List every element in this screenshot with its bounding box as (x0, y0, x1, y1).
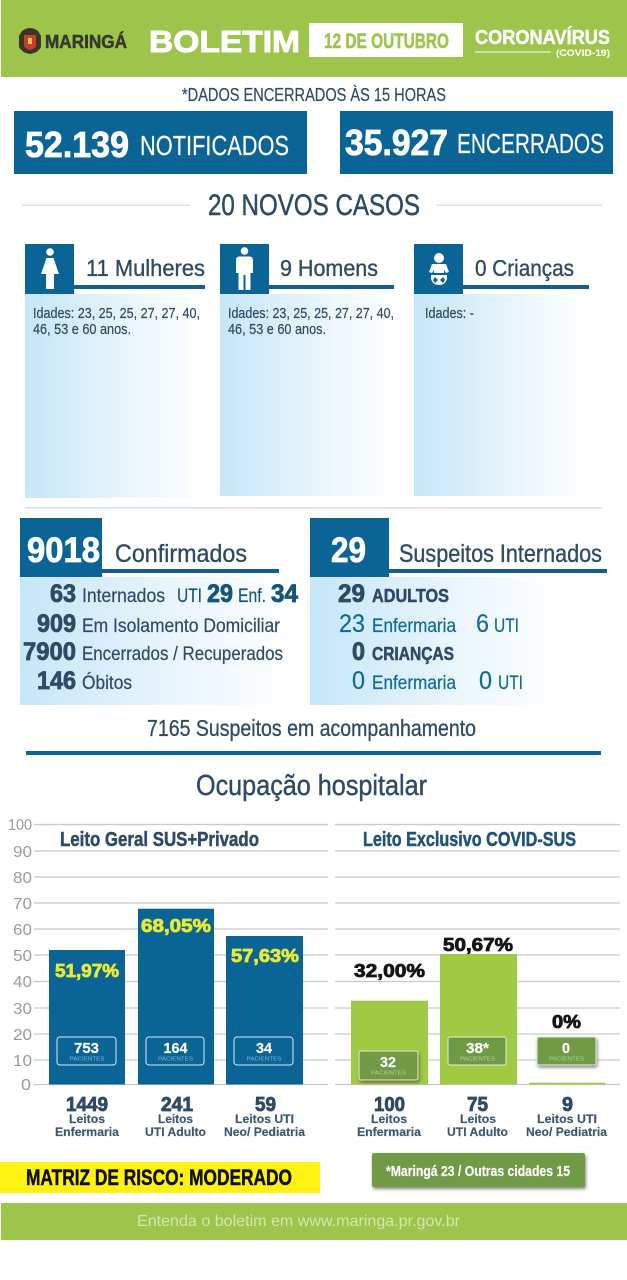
women heading: 11 Mulheres (86, 255, 205, 281)
row: deaths: 146 (37, 667, 76, 695)
bed counts: general: Leitos UTI (235, 1112, 294, 1126)
bed counts: covid: Enfermaria (357, 1125, 421, 1139)
bed counts: general (55, 1094, 305, 1139)
panel: suspected (310, 518, 607, 705)
bar: covid ward (351, 961, 428, 1084)
bar: covid ward: 32,00% (354, 961, 425, 981)
bed counts: covid (357, 1094, 607, 1139)
bar: general ICU: PACIENTES (158, 1056, 193, 1062)
bed counts: covid: Neo/ Pediatria (526, 1125, 607, 1139)
bar: covid pediatric ICU: 0% (552, 1012, 581, 1032)
bed counts: general: Neo/ Pediatria (224, 1125, 305, 1139)
row: adults (338, 580, 449, 608)
bar: covid pediatric ICU: 0 (562, 1040, 570, 1057)
row: adult wards: Enfermaria (372, 616, 456, 637)
bed counts: covid: 100 (374, 1094, 405, 1116)
row: children (352, 638, 454, 666)
women ages: 46, 53 e 60 anos. (33, 321, 131, 338)
title: BOLETIM (149, 24, 300, 59)
panel: men (220, 244, 394, 496)
coronavirus label (475, 26, 610, 58)
women ages (33, 305, 200, 338)
y axis: 40 (13, 974, 32, 991)
men ages (228, 305, 394, 338)
icon: man (236, 247, 253, 290)
bed counts: general: Enfermaria (55, 1125, 119, 1139)
children heading: 0 Crianças (475, 255, 574, 281)
row: child wards: 0 (479, 667, 492, 695)
y axis: 20 (13, 1027, 32, 1044)
bar: covid ICU: 50,67% (443, 935, 513, 955)
row: recovered (23, 638, 283, 666)
heading: new cases: 20 NOVOS CASOS (208, 189, 420, 222)
bed counts: general: 1449 (66, 1094, 108, 1116)
bar: general ICU (138, 909, 214, 1084)
y axis (8, 817, 32, 1094)
row: child wards: Enfermaria (372, 673, 456, 694)
coronavirus label: CORONAVÍRUS (475, 26, 610, 49)
row: hospitalized (50, 580, 298, 608)
row: adult wards: UTI (494, 616, 519, 637)
footer banner (1, 1203, 627, 1240)
coronavirus label: (COVID-19) (556, 48, 610, 58)
bed counts: covid: UTI Adulto (447, 1125, 508, 1139)
children ages: Idades: - (425, 305, 474, 322)
panel: suspected: 29 (331, 531, 366, 570)
row: hospitalized: Internados (82, 586, 165, 607)
y axis: 10 (13, 1053, 32, 1070)
men ages: Idades: 23, 25, 25, 27, 27, 40, (228, 305, 394, 322)
suspects under monitoring: 7165 Suspeitos em acompanhamento (147, 715, 476, 741)
men heading: 9 Homens (280, 255, 378, 281)
row: adult wards: 23 (339, 610, 365, 638)
row: adults: 29 (338, 580, 365, 608)
row: child wards: 0 (352, 667, 365, 695)
footer banner: Entenda o boletim em www.maringa.pr.gov.br (137, 1213, 461, 1230)
row: children: CRIANÇAS (372, 644, 454, 664)
row: recovered: Encerrados / Recuperados (82, 644, 283, 665)
bar: general pediatric ICU: 34 (256, 1040, 273, 1057)
panel: encerrados: 35.927 (345, 122, 448, 163)
y axis: 60 (13, 922, 32, 939)
row: hospitalized: 29 (207, 580, 233, 608)
bar: general ICU: 68,05% (141, 916, 211, 936)
logo wordmark: MARINGÁ (45, 31, 127, 52)
panel: notificados: 52.139 (25, 124, 129, 165)
y axis: 70 (13, 896, 32, 913)
y axis: 100 (8, 817, 32, 834)
icon: city coat of arms (19, 28, 41, 54)
row: hospitalized: UTI (177, 586, 202, 607)
heading: hospital occupancy: Ocupação hospitalar (196, 770, 427, 802)
y axis: 90 (13, 844, 32, 861)
row: hospitalized: 34 (271, 580, 298, 608)
bar: general ward: PACIENTES (70, 1056, 105, 1062)
bed counts: covid: 75 (467, 1094, 488, 1116)
footnote callout: *Maringá 23 / Outras cidades 15 (386, 1164, 570, 1180)
bar: covid pediatric ICU (529, 1012, 605, 1084)
icon: woman (41, 248, 59, 289)
panel title: covid beds: Leito Exclusivo COVID-SUS (363, 829, 576, 851)
row: children: 0 (352, 638, 365, 666)
row: child wards: UTI (498, 673, 523, 694)
bed counts: general: Leitos (158, 1112, 193, 1126)
risk matrix banner (0, 1162, 320, 1193)
women ages: Idades: 23, 25, 25, 27, 27, 40, (33, 305, 200, 322)
footnote callout (372, 1153, 585, 1187)
panel: notificados: NOTIFICADOS (140, 130, 289, 161)
bar: general ward (49, 950, 125, 1084)
row: home isolation: Em Isolamento Domiciliar (82, 616, 281, 637)
row: home isolation: 909 (37, 610, 76, 638)
date box (309, 23, 463, 57)
row: deaths: Óbitos (82, 672, 132, 694)
y axis: 80 (13, 870, 32, 887)
bar: covid ICU: 38* (466, 1040, 489, 1057)
bed counts: general: Leitos (69, 1112, 105, 1126)
men ages: 46, 53 e 60 anos. (228, 321, 326, 338)
panel: confirmed: 9018 (27, 531, 100, 570)
bed counts: covid: 9 (562, 1094, 573, 1116)
panel: notificados (14, 111, 307, 174)
panel: children (414, 244, 589, 496)
bar: general ward: 753 (74, 1040, 99, 1057)
panel: women (25, 244, 205, 498)
bar: covid ICU (440, 935, 517, 1084)
header banner (1, 0, 627, 77)
date box: 12 DE OUTUBRO (324, 30, 449, 53)
row: deaths (37, 667, 132, 695)
bar: covid ward: 32 (380, 1054, 396, 1071)
bed counts: general: 59 (255, 1094, 276, 1116)
bar: general pediatric ICU: 57,63% (231, 946, 299, 966)
y axis: 0 (21, 1077, 31, 1094)
bed counts: covid: Leitos UTI (537, 1112, 597, 1126)
risk matrix banner: MATRIZ DE RISCO: MODERADO (26, 1165, 292, 1190)
bar: general pediatric ICU: PACIENTES (246, 1056, 282, 1062)
bed counts: general: UTI Adulto (145, 1125, 206, 1139)
row: adult wards: 6 (476, 610, 489, 638)
row: child wards (352, 667, 523, 695)
row: adult wards (339, 610, 519, 638)
row: adults: ADULTOS (372, 586, 449, 606)
y axis: 30 (13, 1001, 32, 1018)
bar: covid ICU: PACIENTES (460, 1056, 495, 1062)
row: recovered: 7900 (23, 638, 76, 666)
bed counts: covid: Leitos (371, 1112, 407, 1126)
bar: general ward: 51,97% (55, 961, 119, 981)
chart: hospital bed occupancy (8, 817, 620, 1139)
bar: covid ward: PACIENTES (371, 1070, 406, 1076)
bed counts: general: 241 (161, 1094, 193, 1116)
panel title: general beds: Leito Geral SUS+Privado (60, 829, 259, 851)
panel: suspected: Suspeitos Internados (399, 540, 602, 568)
bed counts: covid: Leitos (460, 1112, 496, 1126)
icon: baby (429, 253, 449, 285)
bar: general ICU: 164 (164, 1040, 188, 1057)
row: hospitalized: Enf. (238, 586, 266, 607)
row: hospitalized: 63 (50, 580, 76, 608)
panel: encerrados (340, 111, 613, 174)
bar: covid pediatric ICU: PACIENTES (549, 1056, 584, 1062)
row: home isolation (37, 610, 281, 638)
bar: general pediatric ICU (226, 936, 303, 1084)
panel: confirmed: Confirmados (115, 540, 247, 568)
panel: confirmed (20, 518, 298, 705)
y axis: 50 (13, 948, 32, 965)
data cutoff note: *DADOS ENCERRADOS ÀS 15 HORAS (182, 85, 446, 105)
